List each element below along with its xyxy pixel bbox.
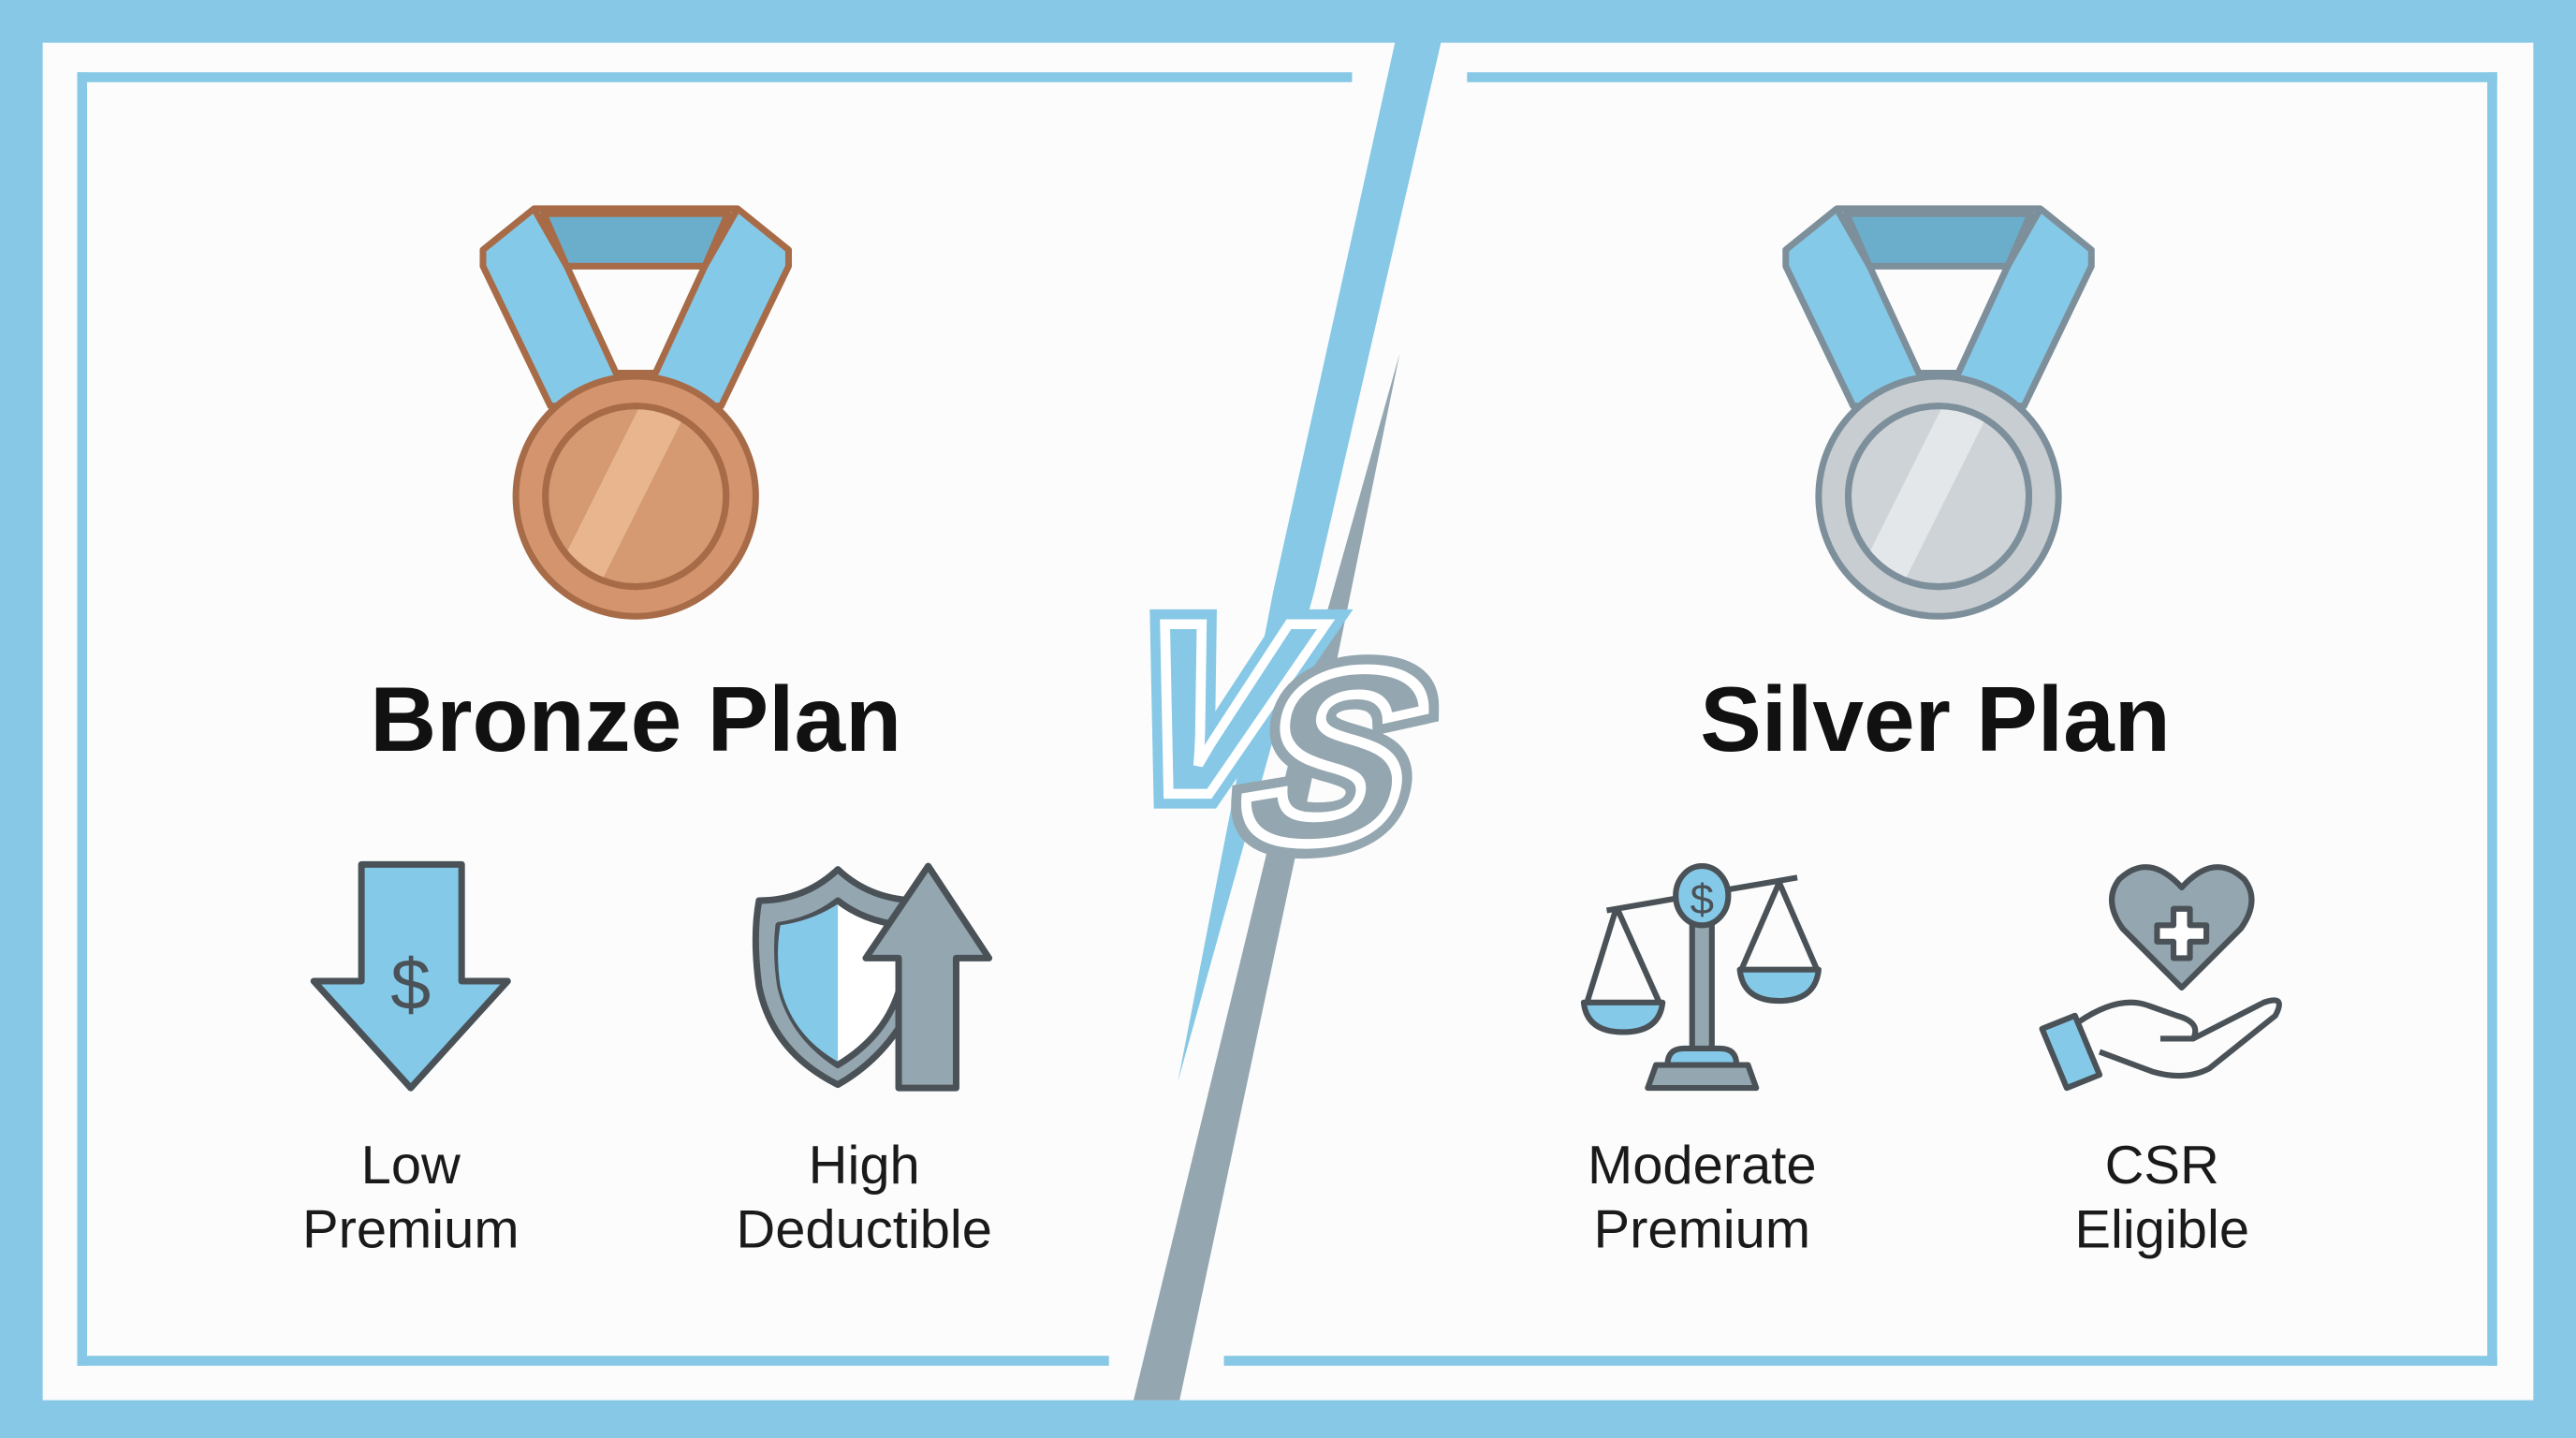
panel: bronze frame xyxy=(77,72,1352,1366)
label: CSR Eligible: Eligible xyxy=(2074,1199,2249,1259)
VS badge xyxy=(1113,571,1447,894)
VS badge: V xyxy=(1113,571,1337,847)
VS badge: V xyxy=(1113,571,1337,847)
icon: down arrow with dollar xyxy=(314,864,507,1088)
title: Silver Plan: Silver Plan xyxy=(1700,668,2171,770)
icon: down arrow with dollar: $ xyxy=(390,945,431,1025)
VS badge: S xyxy=(1222,619,1447,894)
icon: heart in hand xyxy=(2042,867,2279,1088)
label: CSR Eligible: CSR xyxy=(2105,1136,2219,1196)
icon: scales: $ xyxy=(1690,875,1714,923)
icon: bronze medal xyxy=(483,209,788,616)
label: Moderate Premium: Premium xyxy=(1593,1199,1810,1259)
VS badge: S xyxy=(1222,619,1447,894)
icon: scales xyxy=(1584,866,1819,1088)
divider: gray slash xyxy=(1134,353,1399,1401)
title: Bronze Plan: Bronze Plan xyxy=(370,668,901,770)
label: High Deductible: High xyxy=(809,1136,920,1196)
icon: silver medal xyxy=(1786,209,2091,616)
label: Low Premium: Premium xyxy=(302,1199,520,1259)
label: Low Premium: Low xyxy=(361,1136,461,1196)
label: Moderate Premium: Moderate xyxy=(1588,1136,1817,1196)
label: High Deductible: Deductible xyxy=(736,1199,992,1259)
panel: silver frame xyxy=(1224,72,2497,1366)
divider: blue slash xyxy=(1178,37,1442,1081)
icon: shield with up arrow xyxy=(755,866,989,1088)
